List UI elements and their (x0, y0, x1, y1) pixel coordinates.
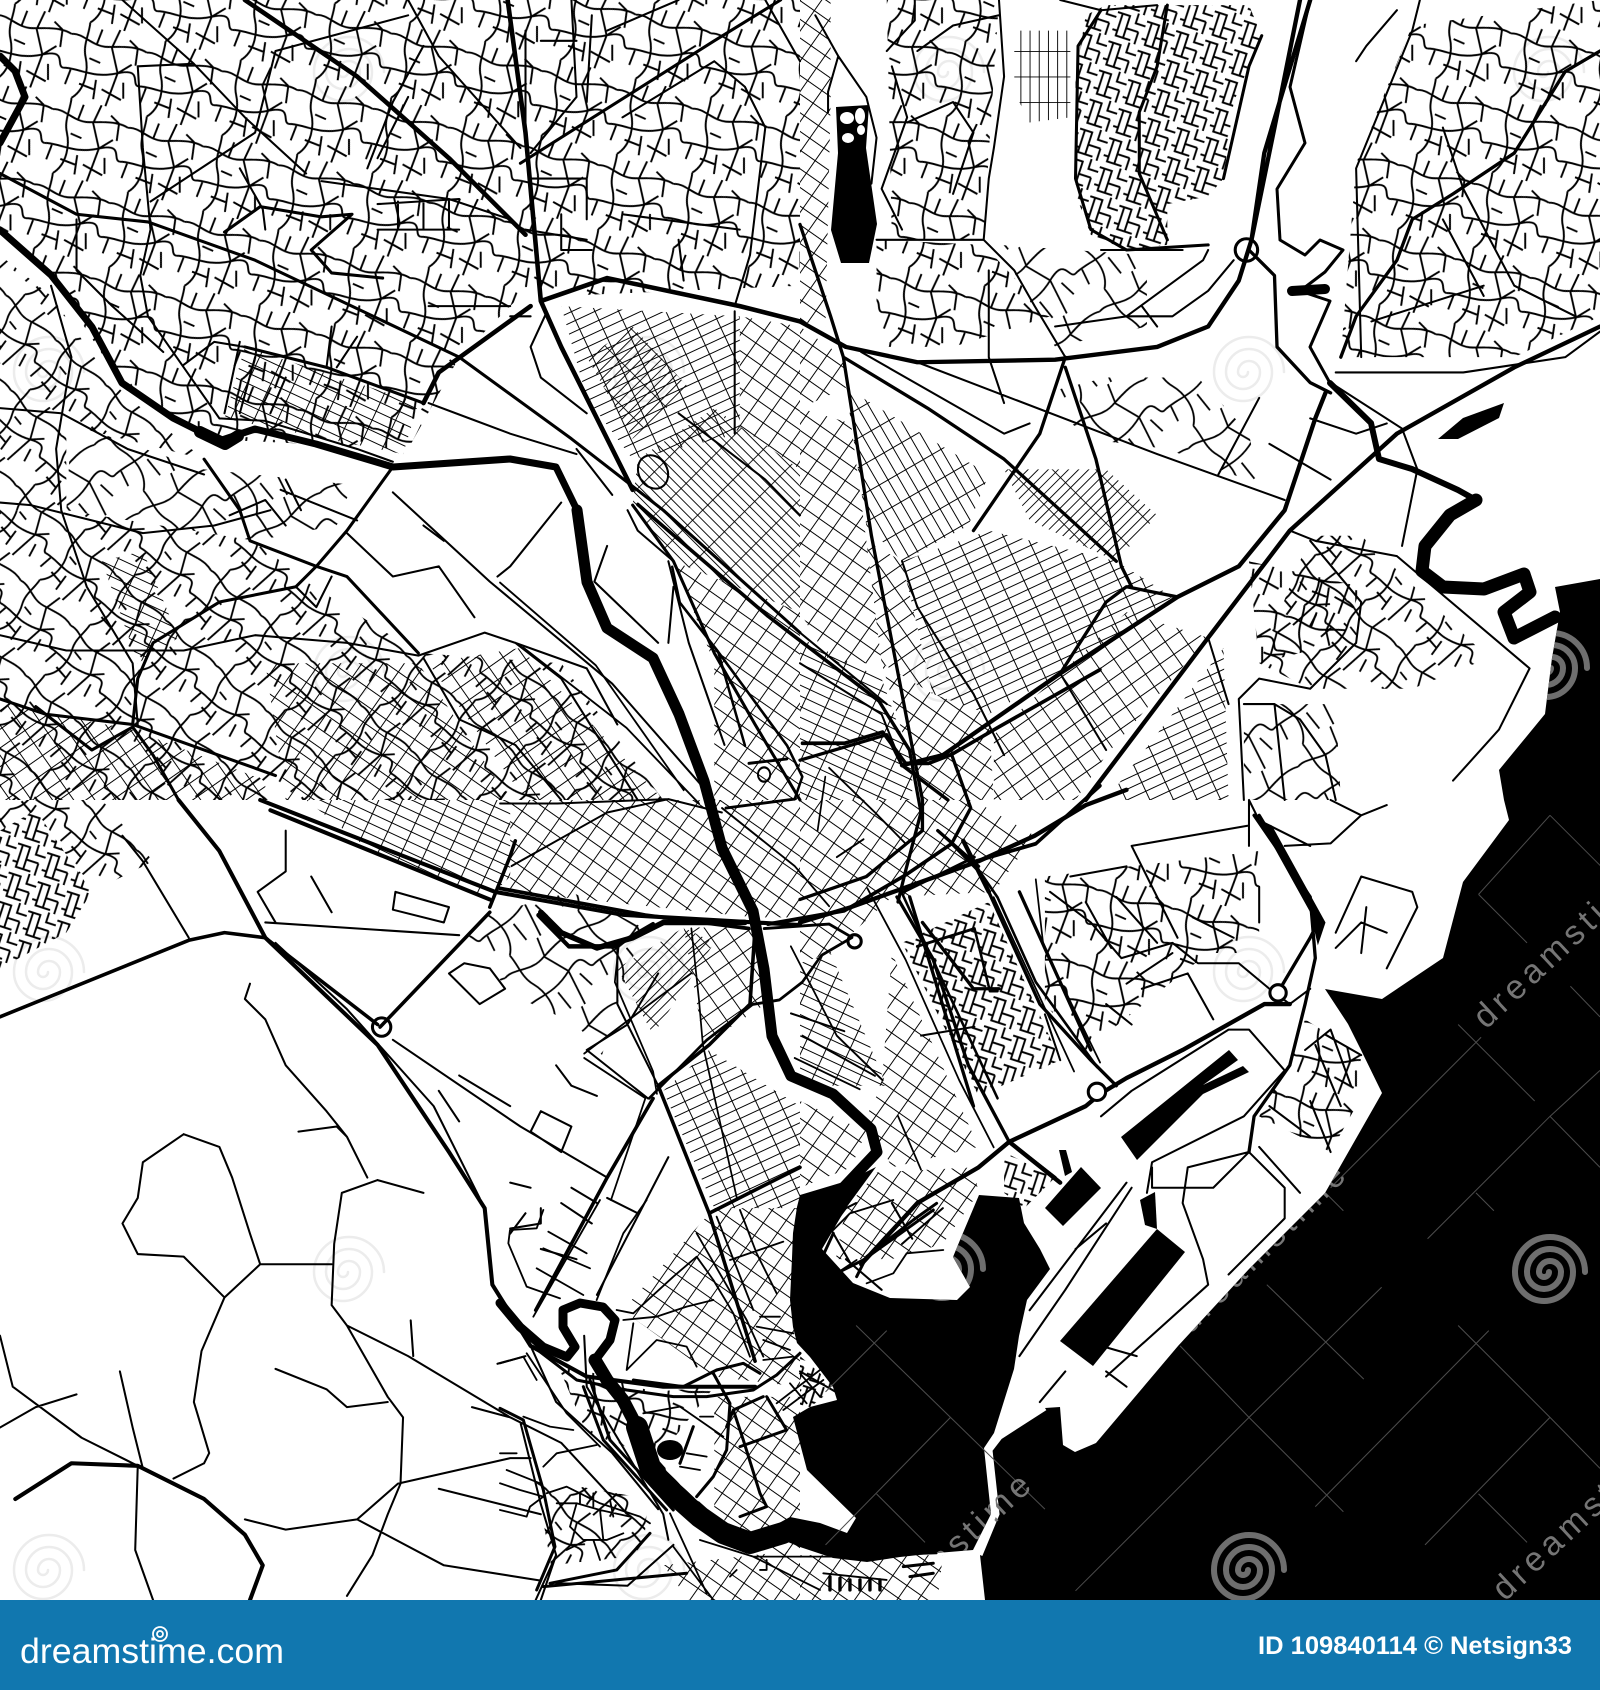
lake islands (840, 108, 865, 143)
medium roads (800, 51, 1600, 800)
roads: cardiff bay detail (500, 1200, 943, 1600)
thick trail (15, 1463, 263, 1600)
roads: north-west quadrant (0, 0, 800, 800)
dock hatch (830, 1577, 880, 1590)
motorway wedge (1259, 820, 1326, 945)
river ely meander (500, 1303, 615, 1360)
river taff bend (200, 432, 238, 444)
north-east river lower (1330, 383, 1476, 500)
dock centre (1045, 1167, 1101, 1226)
river taff (0, 230, 577, 510)
reservoir lake (831, 105, 877, 263)
inner bay (770, 1167, 1050, 1562)
river taff lower (577, 510, 877, 1187)
major roads (800, 790, 1290, 1264)
watermark text: dreamstime (1169, 1153, 1357, 1341)
medium roads (0, 0, 800, 800)
rail yard (538, 915, 653, 946)
river ely lower (595, 1360, 637, 1427)
watermark text (936, 900, 1600, 1599)
lock basin (1059, 1150, 1072, 1176)
roundabout west (372, 1018, 391, 1036)
north-east river (1277, 0, 1343, 383)
dock south (1060, 1229, 1185, 1366)
river ely mouth (637, 1427, 783, 1543)
major roads (245, 0, 800, 490)
watermark lines over the sea (826, 815, 1600, 1591)
medium roads (649, 567, 1097, 1098)
oval track (632, 450, 674, 494)
river top-left (0, 56, 25, 143)
north-east river estuary (1422, 500, 1555, 638)
north-east river blob (1292, 289, 1325, 291)
sea (980, 579, 1600, 1600)
dock north (1121, 1050, 1249, 1160)
street grid texture: south-east quadrant (800, 800, 1361, 1600)
street grid texture: south-west quadrant (0, 800, 800, 1600)
street grid texture: north-west quadrant (0, 0, 800, 800)
estate ring road (1076, 5, 1262, 250)
ely basin (657, 1440, 683, 1460)
roads: north-east quadrant (800, 0, 1600, 800)
medium roads (0, 841, 800, 1361)
roads: south-west quadrant (0, 800, 800, 1600)
white quay (670, 1468, 700, 1497)
roads: city centre detail (500, 504, 1100, 1200)
white causeway on the water (980, 1408, 1045, 1555)
roundabouts (848, 935, 1286, 1101)
major roads (800, 0, 1600, 800)
stadium (758, 767, 770, 782)
roads: south-east quadrant (800, 790, 1417, 1402)
motorway (179, 800, 800, 1387)
rail yards (541, 912, 745, 948)
watermark text: dreamstime (850, 1463, 1042, 1646)
roundabout (1235, 239, 1258, 261)
major roads (500, 504, 1100, 929)
small north-east lake (1438, 403, 1504, 439)
medium roads (800, 800, 1320, 1178)
footer logo spiral (153, 1627, 167, 1641)
footer credit: ID 109840114 © Netsign33 (1258, 1632, 1572, 1660)
street grid texture: north-east quadrant (800, 0, 1600, 800)
footer logo: dreamstime.com (20, 1632, 284, 1671)
dock channel (1140, 1192, 1157, 1229)
medium roads (500, 1203, 937, 1590)
watermark spirals on the sea (913, 633, 1587, 1599)
footer bar (0, 1600, 1600, 1690)
